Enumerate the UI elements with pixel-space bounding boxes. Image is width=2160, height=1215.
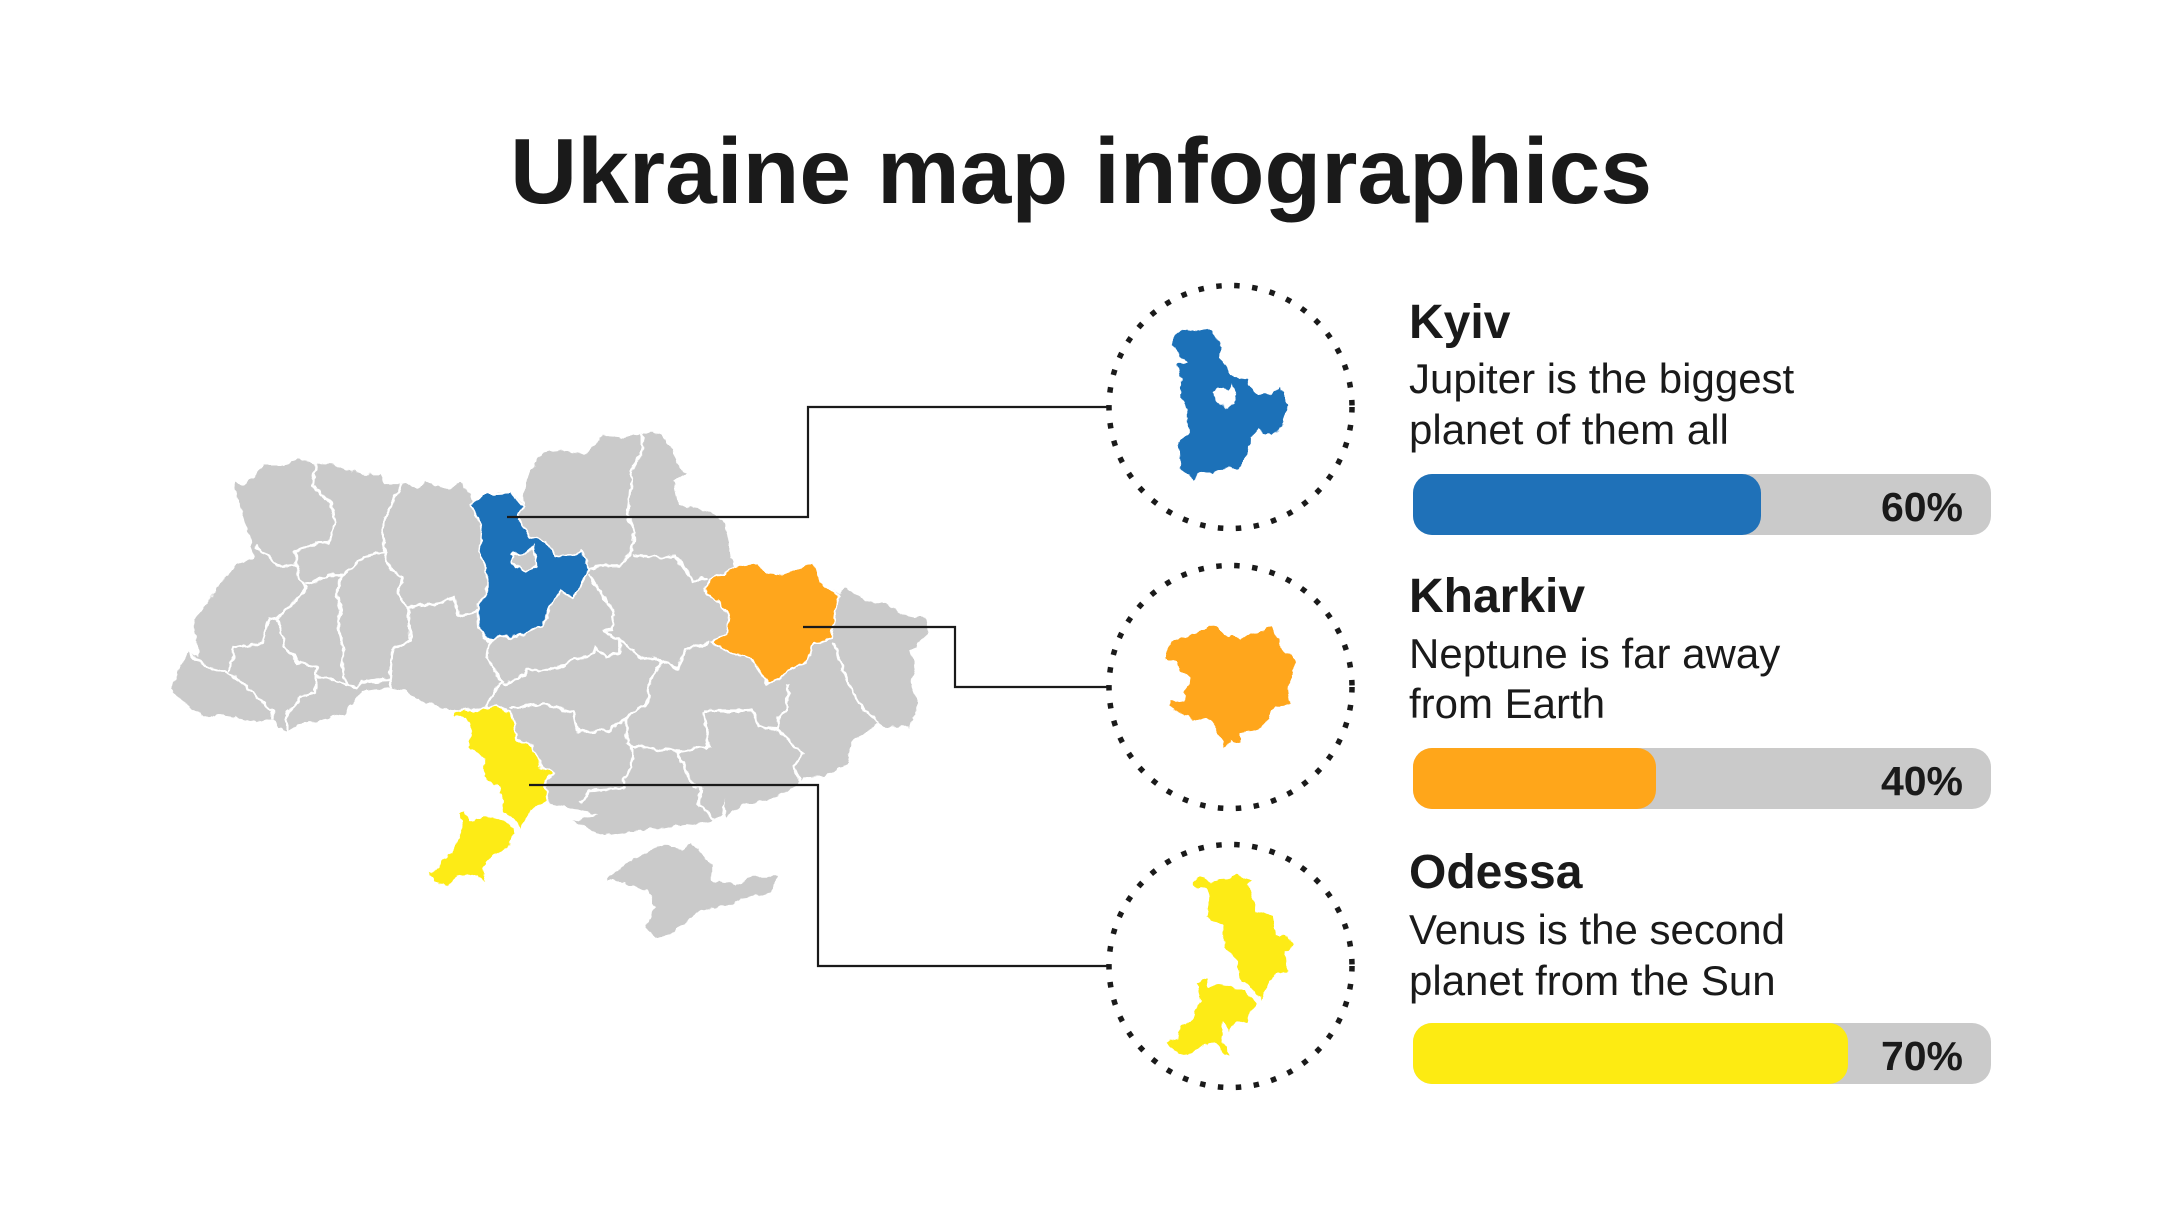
progress bar: Odessa 70% [1413, 1023, 1991, 1084]
panel: Kyiv [1409, 296, 1991, 535]
progress bar: Kyiv 60% [1413, 474, 1991, 535]
progress bar: Kharkiv 40% [1413, 748, 1991, 809]
heading: Kharkiv: Kharkiv [1409, 570, 1585, 623]
text: Odessa description: Venus is the second [1409, 906, 1785, 953]
map: region borders [188, 433, 880, 820]
dotted circle: Kyiv [1109, 286, 1352, 528]
map: Odessa region [428, 705, 554, 887]
panel: Odessa [1409, 846, 1991, 1084]
progress bar: Kharkiv 40%: 40% [1881, 758, 1963, 804]
dotted circle: Kharkiv [1109, 566, 1352, 808]
progress bar: Kyiv 60%: 60% [1881, 484, 1963, 530]
map of Ukraine [170, 433, 928, 937]
title: Ukraine map infographics [510, 119, 1652, 223]
text: Kharkiv description: from Earth [1409, 680, 1605, 727]
text: Kharkiv description: Neptune is far away [1409, 630, 1780, 677]
progress bar: Odessa 70%: 70% [1881, 1033, 1963, 1079]
map: Kharkiv region [704, 562, 839, 684]
text: Odessa description: planet from the Sun [1409, 957, 1776, 1004]
text: Kyiv description: planet of them all [1409, 406, 1729, 453]
icon: Kharkiv region [1165, 626, 1296, 747]
heading: Odessa: Odessa [1409, 846, 1583, 899]
icon: Kyiv region [1172, 328, 1289, 479]
icon: Odessa region [1168, 875, 1294, 1057]
panel: Kharkiv [1409, 570, 1991, 809]
heading: Kyiv: Kyiv [1409, 296, 1511, 349]
leader line: Kharkiv [803, 627, 1110, 687]
map: Crimea [607, 843, 778, 937]
leader line: Kyiv [507, 407, 1110, 517]
leader line: Odessa [529, 785, 1110, 966]
map: Kyiv region [471, 493, 589, 642]
map: mainland regions [170, 433, 928, 836]
text: Kyiv description: Jupiter is the biggest [1409, 355, 1794, 402]
dotted circle: Odessa [1109, 844, 1352, 1088]
